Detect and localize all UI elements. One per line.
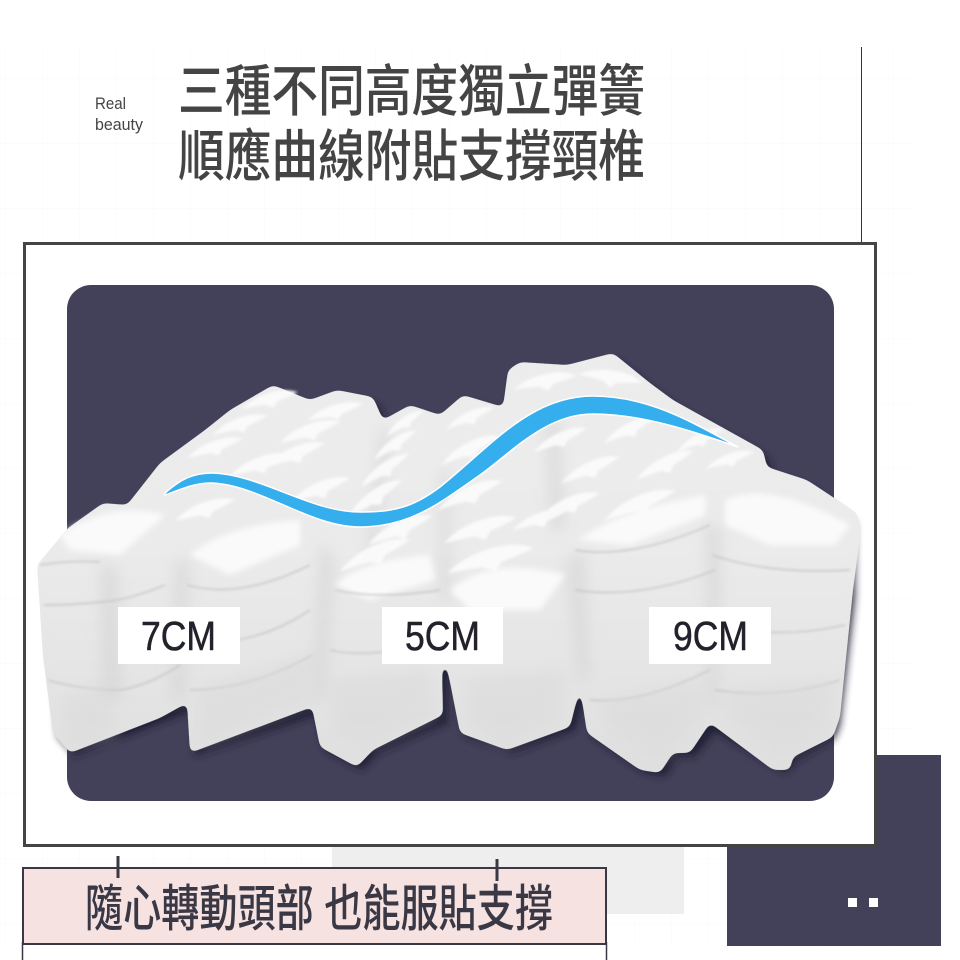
title: 順應曲線附貼支撐頸椎 <box>178 125 645 188</box>
mattress shadow <box>50 361 855 776</box>
grey block <box>332 840 684 914</box>
small label: Real beauty: beauty <box>95 115 143 134</box>
vertical rule <box>861 47 862 243</box>
caption box <box>23 868 606 944</box>
caption box: 隨心轉動頭部 也能服貼支撐 <box>85 881 553 937</box>
dark corner block <box>727 755 941 946</box>
small label: Real beauty <box>95 94 143 134</box>
label: 7CM <box>118 607 240 664</box>
title <box>178 60 645 188</box>
lower coil shading <box>60 650 835 760</box>
lower box outline <box>22 942 606 960</box>
label: 7CM: 7CM <box>141 613 216 659</box>
label: 9CM: 9CM <box>673 613 748 659</box>
caption tick marks <box>116 856 498 881</box>
label: 5CM <box>382 607 503 664</box>
small label: Real beauty: Real <box>95 94 126 113</box>
front coil bands <box>40 525 850 701</box>
mattress body <box>37 353 861 773</box>
white dots <box>848 898 878 907</box>
label: 5CM: 5CM <box>405 613 480 659</box>
front coil tops <box>60 494 850 610</box>
pocket spring mattress <box>37 353 861 776</box>
label: 9CM <box>649 607 771 664</box>
dark image panel <box>67 285 834 801</box>
blue curve <box>165 396 738 527</box>
title: 三種不同高度獨立彈簧 <box>178 60 645 123</box>
column shading <box>100 420 722 710</box>
main frame <box>24 244 876 846</box>
ruffled tops of the back rows <box>172 363 757 582</box>
